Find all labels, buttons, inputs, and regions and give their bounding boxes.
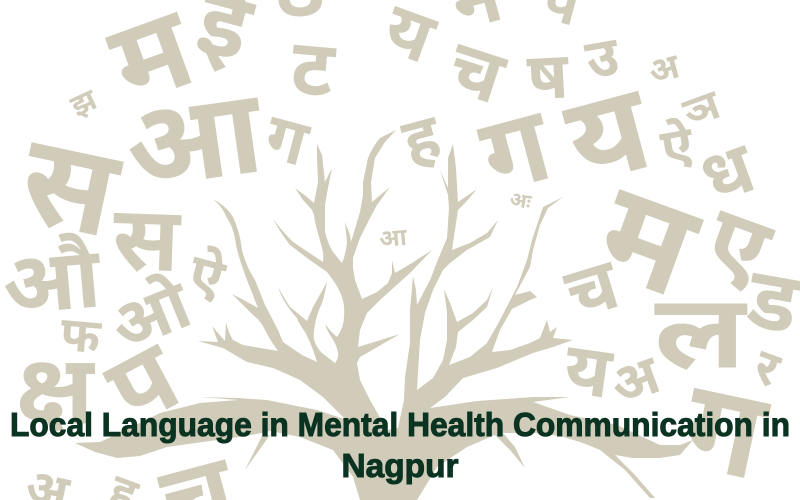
letter: sha: ष (525, 39, 572, 127)
letter: a small: अ (645, 47, 686, 99)
letter: au: औ (0, 230, 107, 350)
letter: pha: फ (57, 307, 104, 373)
letter: ta: ट (287, 23, 339, 129)
letter: ksha: क्ष (16, 336, 95, 464)
letter: cha right: च (556, 243, 633, 348)
letter: ai right: ऐ (656, 115, 701, 188)
letter: la: ल (654, 276, 748, 410)
letter: ai: ऐ (180, 242, 232, 321)
title (10, 406, 790, 484)
letter: o: ओ (100, 266, 207, 378)
letter: ga large: ग (469, 85, 569, 235)
letter: aa: आ (117, 66, 274, 238)
letter: ha: ह (396, 101, 452, 189)
left root twig (245, 435, 270, 470)
letter: cha: च (434, 24, 516, 134)
letter: aa small: आ (378, 223, 409, 257)
tree silhouette (75, 130, 693, 500)
letter: jha: झ (66, 83, 105, 129)
title: Local Language in Mental Health Communication in (10, 406, 790, 443)
letter: ya right: य (558, 328, 617, 428)
letter: pa: प (89, 319, 206, 464)
letter: sa: स (111, 188, 183, 308)
tree illustration (75, 130, 693, 500)
letter: ma right: म (572, 155, 716, 351)
letter: ah small: अः (507, 188, 533, 218)
letter: sa large: स (5, 109, 132, 288)
letter: ya large: य (553, 59, 671, 233)
letter: ra: र (744, 339, 787, 408)
letter: nya: ञ (676, 81, 730, 145)
title: Nagpur (342, 447, 459, 484)
letter: e: ए (687, 186, 785, 323)
letter: u: उ (581, 26, 626, 102)
letter: ga: ग (255, 100, 317, 193)
letter: dha: ध (691, 127, 771, 233)
letter: a right: अ (603, 344, 672, 427)
